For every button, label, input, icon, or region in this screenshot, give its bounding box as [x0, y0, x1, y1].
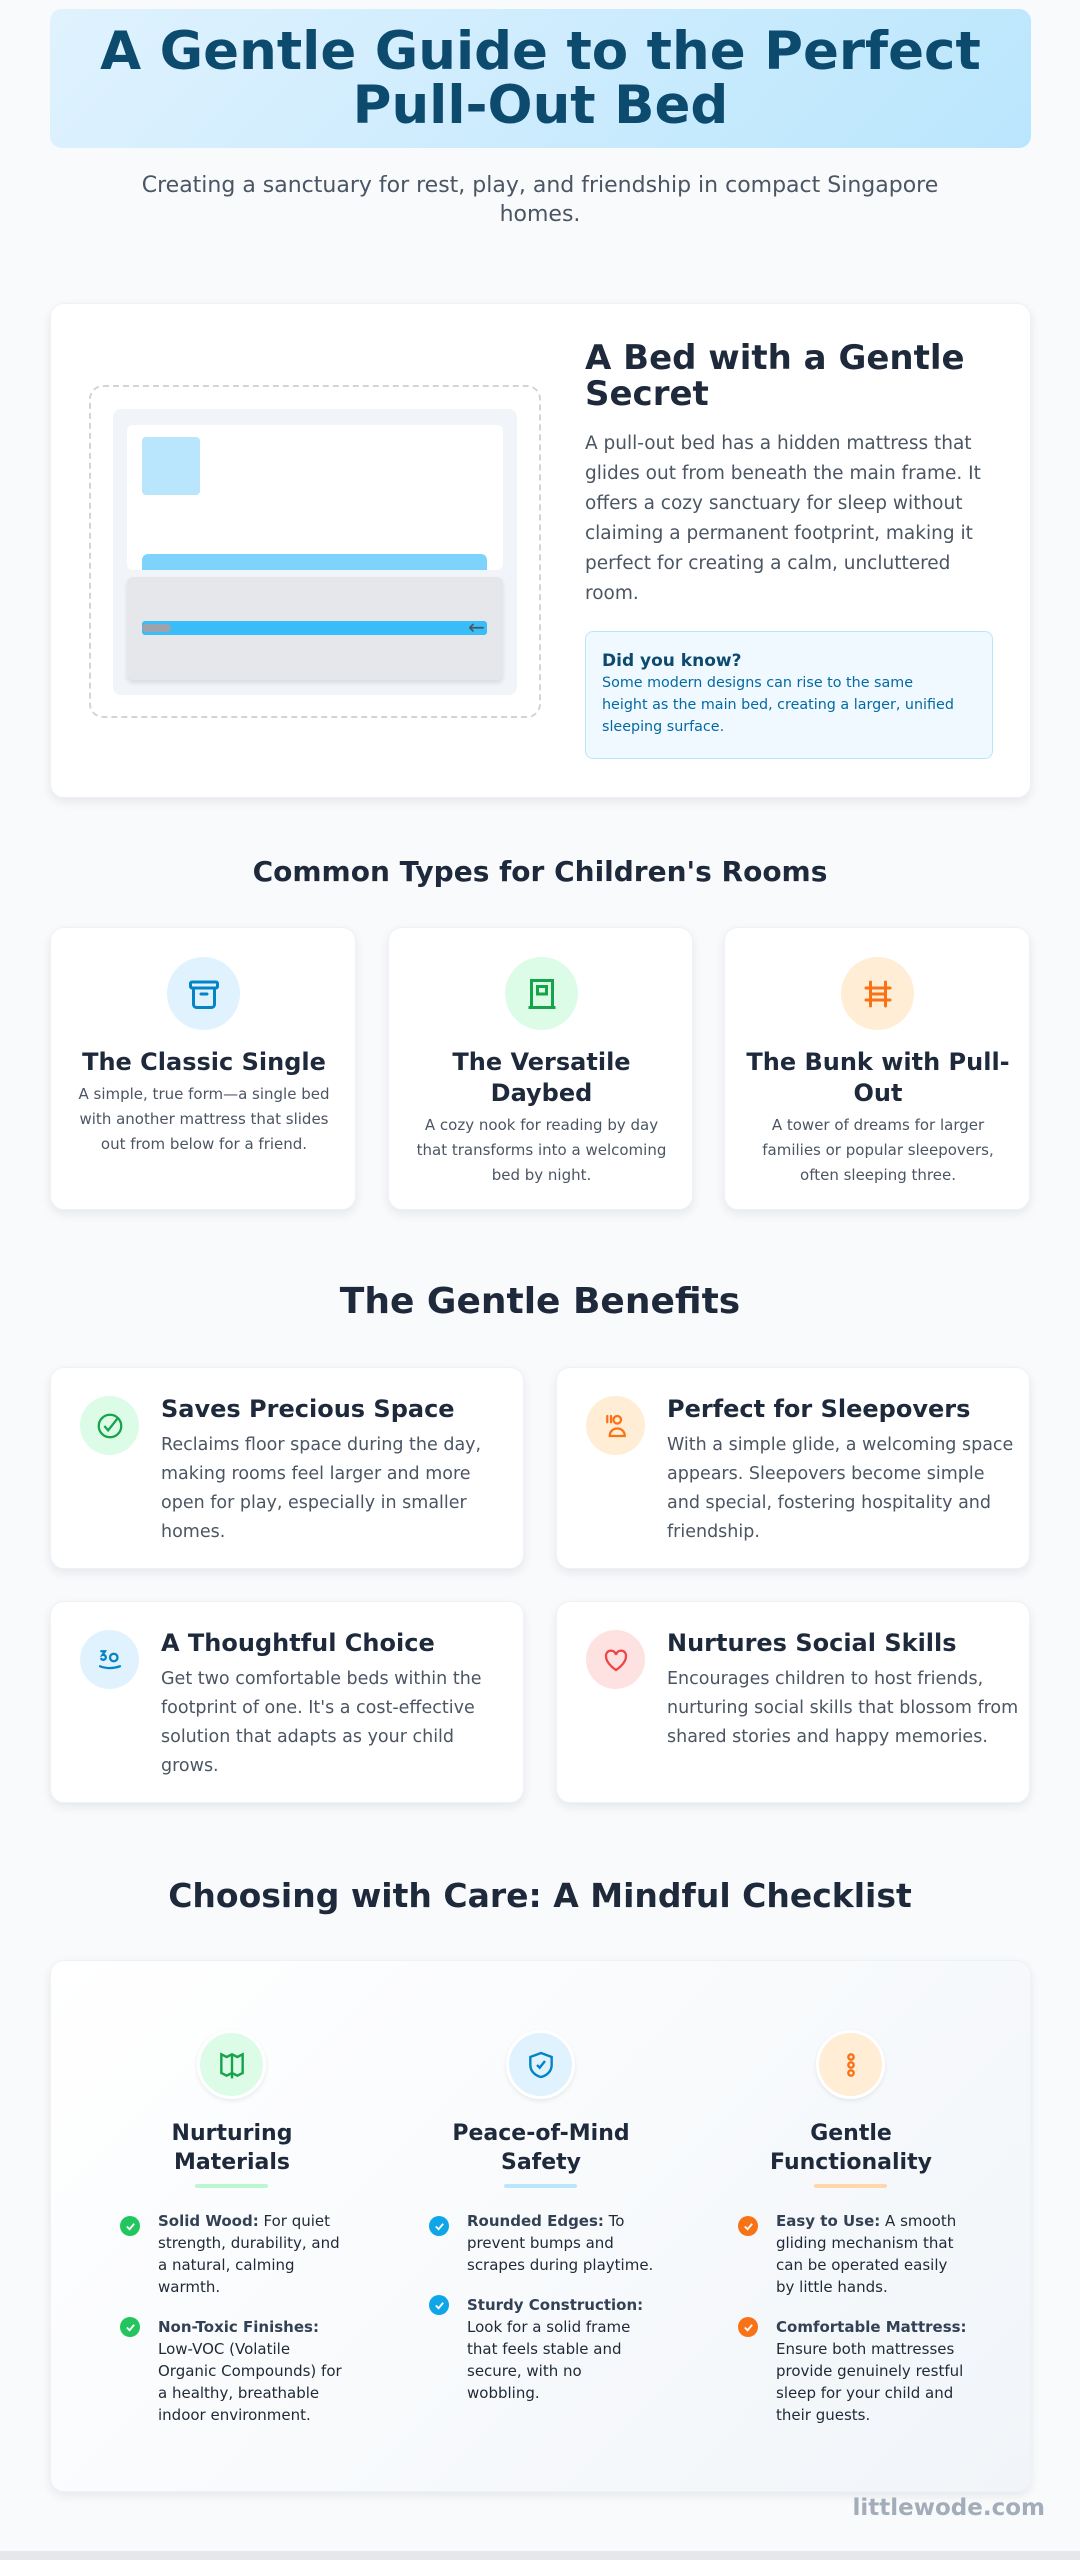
panel: intro — [50, 303, 1031, 798]
icon: ladder — [841, 957, 914, 1030]
callout: did you know: Did you know? — [602, 651, 741, 671]
column: materials: Solid Wood: For quiet — [158, 2212, 330, 2230]
panel: checklist: their guests. — [776, 2406, 870, 2424]
illustration: pull-out bed — [89, 385, 541, 718]
subtitle: Creating a sanctuary for rest, play, and friendship in compact Singapore homes. — [142, 173, 938, 227]
panel: checklist: Sturdy Construction: — [467, 2296, 643, 2314]
benefit: social skills: nurturing social skills that blossom from — [667, 1698, 1018, 1718]
panel: checklist: secure, with no — [467, 2362, 582, 2380]
icon: person — [586, 1396, 645, 1455]
card: versatile daybed — [388, 927, 693, 1210]
benefit: thoughtful choice: A Thoughtful Choice — [161, 1629, 435, 1657]
column: materials: warmth. — [158, 2278, 220, 2296]
panel: checklist: by little hands. — [776, 2278, 888, 2296]
card: classic single — [50, 927, 356, 1210]
panel: checklist — [50, 1960, 1031, 2492]
benefit: social skills: Encourages children to host friends, — [667, 1669, 983, 1689]
icon: dots — [816, 2030, 885, 2099]
benefit: sleepovers: friendship. — [667, 1522, 760, 1542]
illustration: pull-out bed: ← — [468, 615, 485, 639]
heading: A Bed with a Gentle Secret: A Bed with a Gentle Secret — [585, 338, 965, 414]
column: functionality — [738, 2031, 967, 2424]
column: materials: Organic Compounds) for — [158, 2362, 342, 2380]
card: bunk: A tower of dreams for larger families or popular sleepovers, often sleeping three. — [762, 1116, 994, 1184]
benefit: saves space — [50, 1367, 524, 1569]
column: safety — [429, 2033, 653, 2402]
icon: door — [505, 957, 578, 1030]
panel: checklist: provide genuinely restful — [776, 2362, 963, 2380]
heading: gentle benefits: The Gentle Benefits — [340, 1281, 740, 1322]
panel: checklist: can be operated easily — [776, 2256, 947, 2274]
column: materials — [120, 2033, 342, 2424]
benefit: sleepovers: Perfect for Sleepovers — [667, 1395, 970, 1423]
card: bunk: The Bunk with Pull-Out — [746, 1048, 1010, 1107]
benefit: social skills: shared stories and happy memories. — [667, 1727, 988, 1747]
column: materials: indoor environment. — [158, 2406, 311, 2424]
benefit: sleepovers: appears. Sleepovers become simple — [667, 1464, 985, 1484]
panel: checklist: Rounded Edges: To — [467, 2212, 624, 2230]
heading: checklist: Choosing with Care: A Mindful Checklist — [168, 1876, 912, 1915]
footer: brand: littlewode.com — [852, 2495, 1045, 2521]
column: materials: strength, durability, and — [158, 2234, 340, 2252]
panel: checklist: sleep for your child and — [776, 2384, 953, 2402]
benefit: thoughtful choice: Get two comfortable beds within the — [161, 1669, 482, 1689]
column: materials: Nurturing Materials — [172, 2121, 292, 2175]
benefit: social skills: Nurtures Social Skills — [667, 1629, 957, 1657]
column: materials: Non-Toxic Finishes: — [158, 2318, 319, 2336]
card: bunk — [724, 927, 1030, 1210]
icon: book — [197, 2030, 266, 2099]
panel: checklist: wobbling. — [467, 2384, 540, 2402]
benefit: saves space: Reclaims floor space during the day, — [161, 1435, 481, 1455]
icon: heart — [586, 1630, 645, 1689]
heading: common types: Common Types for Children's Rooms — [253, 855, 827, 888]
benefit: thoughtful choice: grows. — [161, 1756, 219, 1776]
icon: coins — [80, 1630, 139, 1689]
panel: checklist: Peace-of-Mind Safety — [452, 2121, 630, 2175]
card: versatile daybed: The Versatile Daybed — [452, 1048, 631, 1107]
benefit: saves space: homes. — [161, 1522, 225, 1542]
title banner: A Gentle Guide to the Perfect — [100, 20, 981, 82]
panel: checklist: scrapes during playtime. — [467, 2256, 653, 2274]
panel: checklist: prevent bumps and — [467, 2234, 614, 2252]
panel: checklist: Comfortable Mattress: — [776, 2318, 967, 2336]
panel: checklist: Gentle Functionality — [770, 2121, 932, 2175]
benefit: social skills — [556, 1601, 1030, 1803]
column: materials: Low-VOC (Volatile — [158, 2340, 290, 2358]
column: materials: a natural, calming — [158, 2256, 295, 2274]
benefit: sleepovers — [556, 1367, 1030, 1569]
panel: checklist: that feels stable and — [467, 2340, 622, 2358]
paragraph: A pull-out bed has a hidden mattress that glides out from beneath the main frame. It offers a cozy sanctuary for sleep without claiming a permanent footprint, making it perfect for creating a calm, uncluttered room. — [585, 433, 981, 604]
benefit: saves space: open for play, especially in smaller — [161, 1493, 467, 1513]
benefit: sleepovers: With a simple glide, a welcoming space — [667, 1435, 1013, 1455]
title banner: Pull-Out Bed — [353, 74, 728, 136]
benefit: thoughtful choice — [50, 1601, 524, 1803]
panel: checklist: Look for a solid frame — [467, 2318, 630, 2336]
card: classic single: The Classic Single — [82, 1048, 326, 1076]
icon: shield — [506, 2030, 575, 2099]
panel: checklist: Easy to Use: A smooth — [776, 2212, 956, 2230]
callout: did you know: sleeping surface. — [602, 719, 724, 735]
callout: did you know: height as the main bed, creating a larger, unified — [602, 697, 954, 713]
callout: did you know — [585, 631, 993, 759]
icon: check circle — [80, 1396, 139, 1455]
title banner — [50, 9, 1031, 148]
benefit: thoughtful choice: solution that adapts as your child — [161, 1727, 454, 1747]
column: materials: a healthy, breathable — [158, 2384, 319, 2402]
panel: checklist: Ensure both mattresses — [776, 2340, 954, 2358]
benefit: thoughtful choice: footprint of one. It's a cost-effective — [161, 1698, 475, 1718]
benefit: sleepovers: and special, fostering hospitality and — [667, 1493, 991, 1513]
callout: did you know: Some modern designs can rise to the same — [602, 675, 913, 691]
benefit: saves space: making rooms feel larger and more — [161, 1464, 471, 1484]
card: versatile daybed: A cozy nook for reading by day that transforms into a welcoming bed by night. — [417, 1116, 666, 1184]
icon: archive box — [167, 957, 240, 1030]
panel: checklist: gliding mechanism that — [776, 2234, 953, 2252]
card: classic single: A simple, true form—a single bed with another mattress that slides out from below for a friend. — [78, 1085, 330, 1153]
benefit: saves space: Saves Precious Space — [161, 1395, 455, 1423]
